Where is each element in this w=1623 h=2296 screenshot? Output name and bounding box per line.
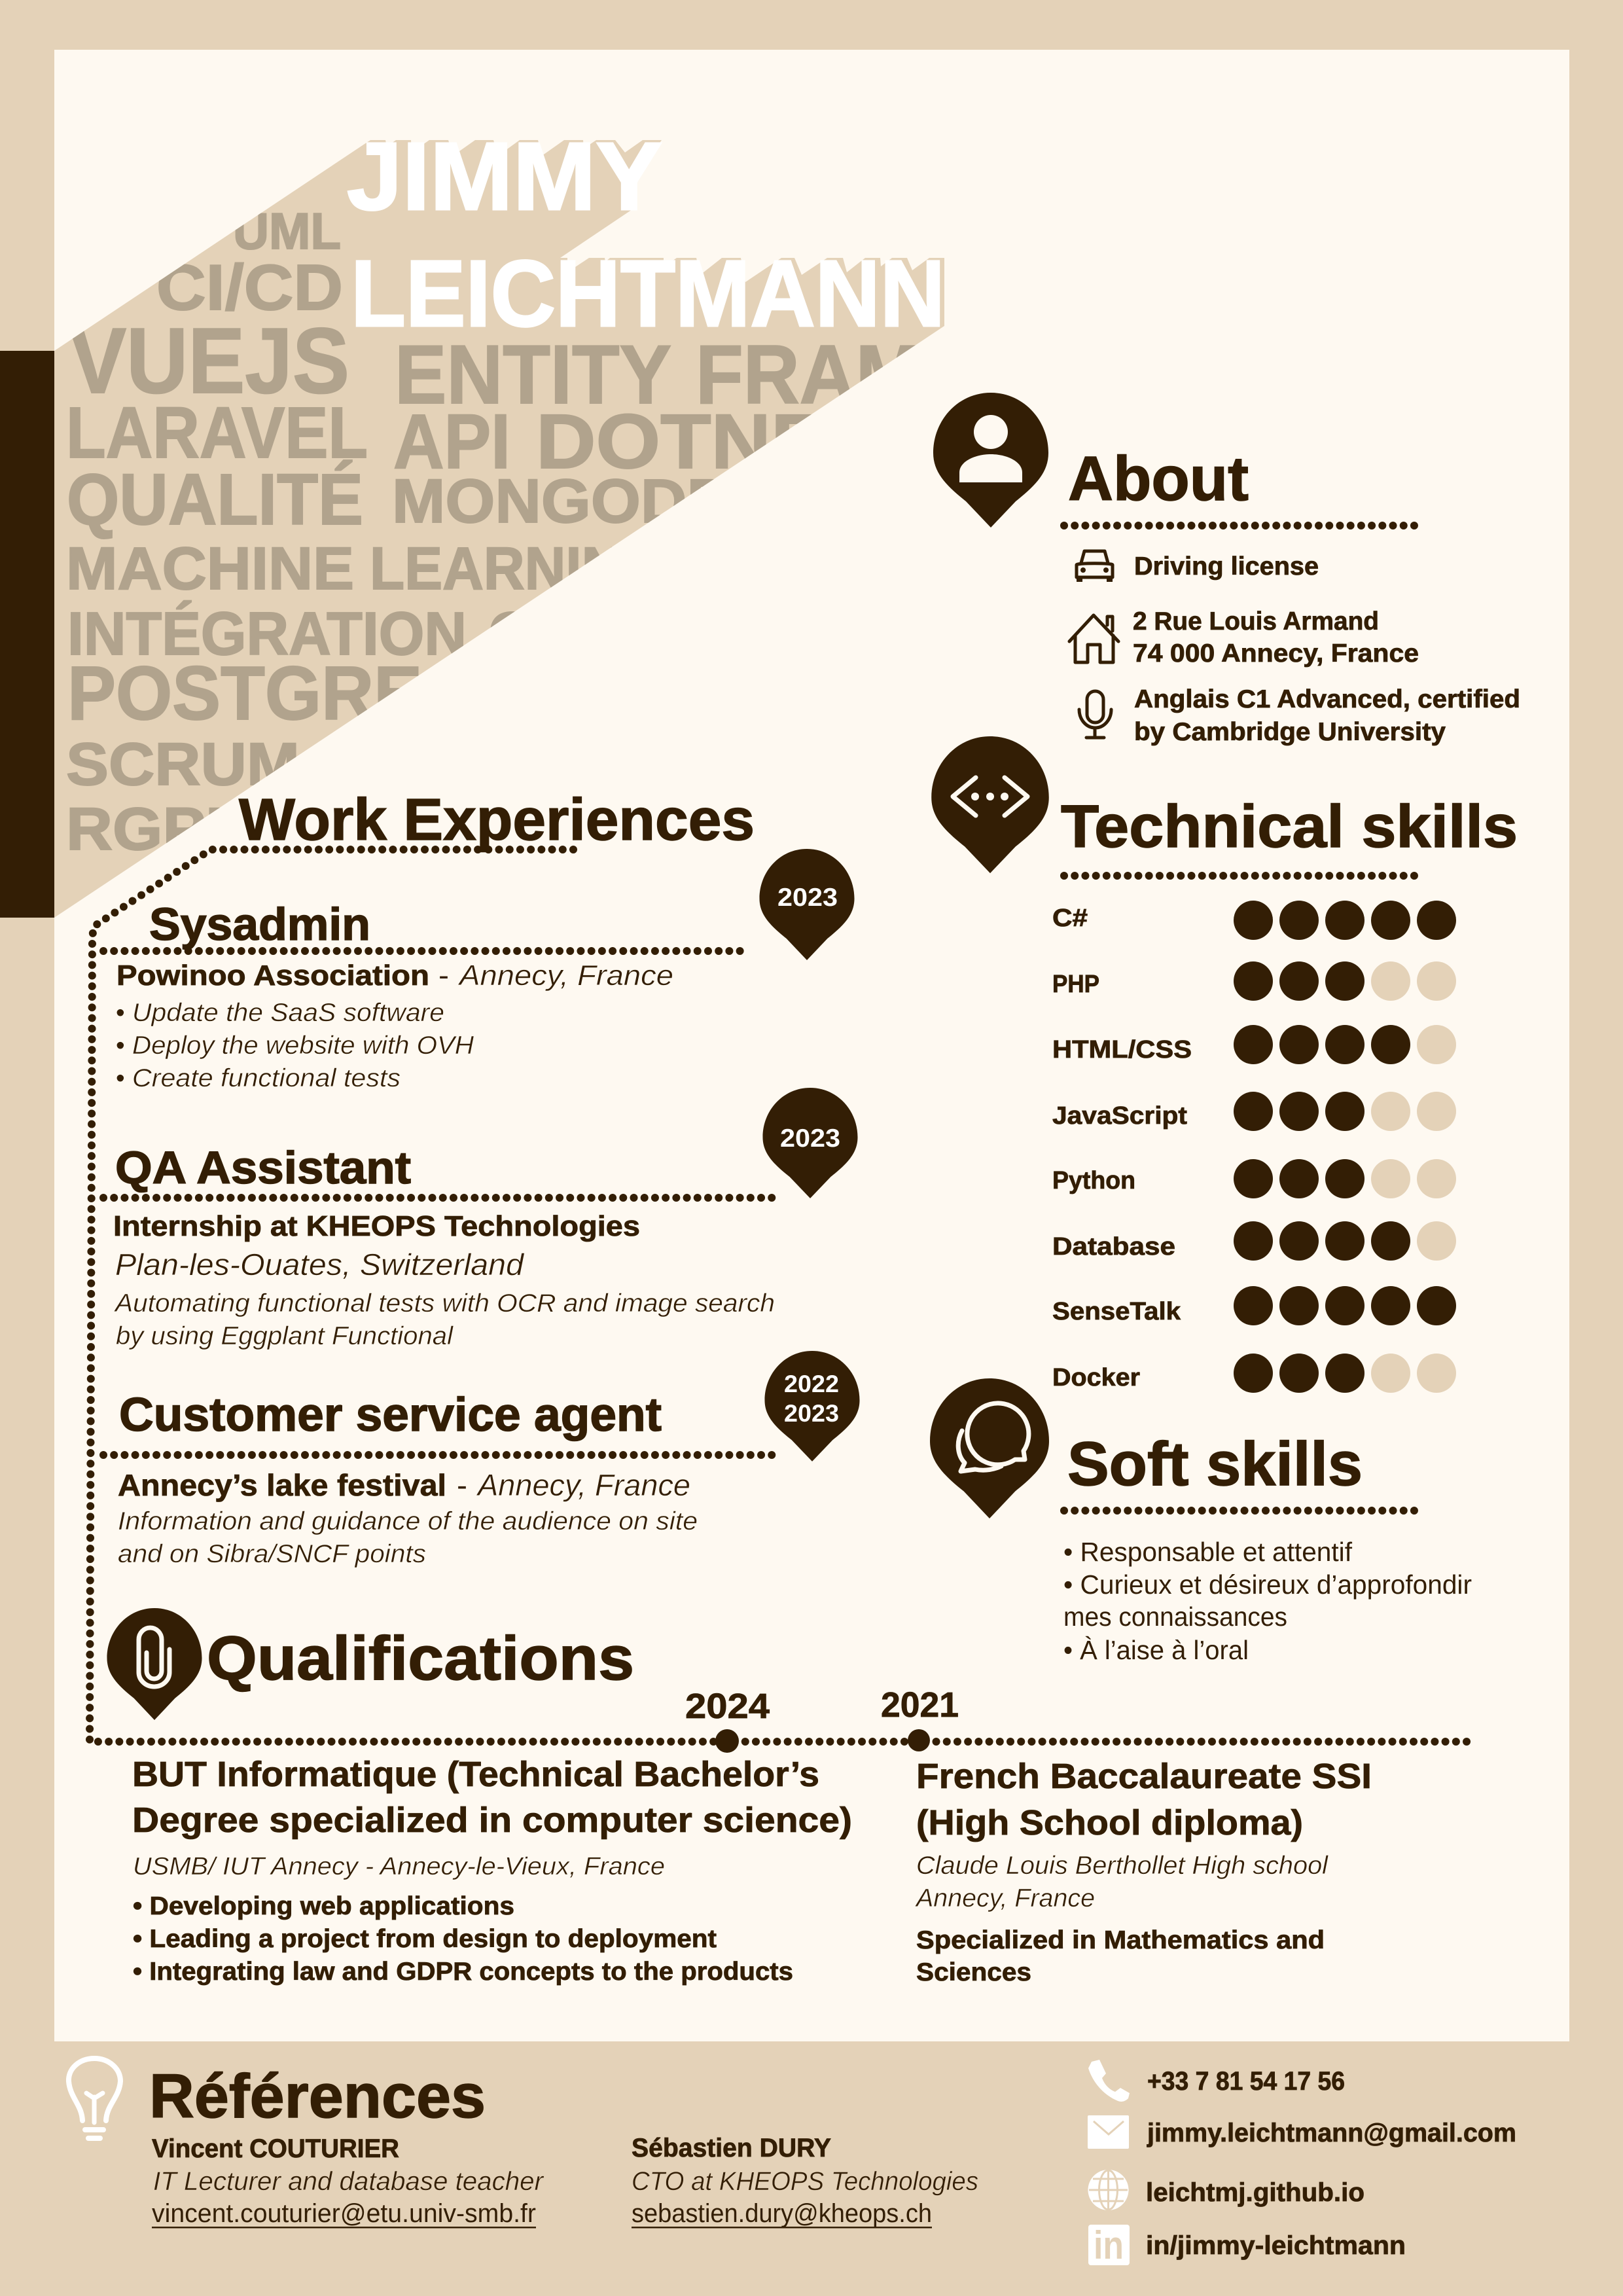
year pin 2023: 2023 — [780, 1124, 840, 1153]
panel: QA Assistant job: by using Eggplant Functional — [116, 1322, 454, 1350]
panel: contact details: +33 7 81 54 17 56 — [1147, 2067, 1345, 2096]
panel: contact details: jimmy.leichtmann@gmail.com — [1147, 2119, 1516, 2147]
timeline dotted path — [90, 850, 1476, 1742]
panel: Qualifications: • Integrating law and GDPR concepts to the products — [133, 1958, 793, 1986]
skill: Docker: Docker — [1052, 1364, 1140, 1391]
title: name — [347, 123, 945, 346]
skill: PHP: PHP — [1052, 971, 1099, 998]
panel: References: CTO at KHEOPS Technologies — [632, 2167, 978, 2196]
skill: HTML/CSS: HTML/CSS — [1052, 1036, 1192, 1064]
panel: contact details: in/jimmy-leichtmann — [1146, 2231, 1406, 2260]
panel: Qualifications: 2024 — [685, 1687, 770, 1726]
year pin 2022-2023: 2023 — [784, 1400, 839, 1427]
panel: Soft skills: • Responsable et attentif — [1063, 1537, 1353, 1567]
panel: Qualifications: USMB/ IUT Annecy - Annecy-le-Vieux, France — [133, 1853, 665, 1880]
panel: QA Assistant job: Plan-les-Ouates, Switzerland — [115, 1247, 524, 1282]
panel: About: 74 000 Annecy, France — [1133, 639, 1419, 668]
icon: globe — [1088, 2170, 1128, 2210]
year pin 2023 — [762, 1088, 858, 1198]
keyword cloud: MACHINE — [66, 535, 354, 602]
icon: house — [1069, 615, 1118, 662]
dark side bar — [0, 351, 54, 918]
panel: Sysadmin job: • — [116, 1064, 125, 1092]
panel: Sysadmin job: Sysadmin — [149, 899, 370, 950]
panel: Sysadmin job: • — [116, 999, 125, 1027]
panel: References: Sébastien DURY — [632, 2134, 831, 2162]
skill: JavaScript — [1052, 1092, 1456, 1131]
keyword cloud: POSTGRESQL — [67, 651, 571, 736]
keyword cloud: UML — [233, 202, 341, 260]
panel: Qualifications: • Leading a project from design to deployment — [133, 1925, 717, 1953]
skill: Database — [1052, 1221, 1456, 1261]
panel: Customer service job: Annecy’s lake festival — [118, 1468, 446, 1502]
panel: About — [933, 393, 1520, 746]
panel: Soft skills: mes connaissances — [1063, 1602, 1287, 1632]
keyword cloud: FRAMEWORK — [696, 328, 1219, 421]
icon: microphone — [1079, 691, 1111, 738]
keyword cloud: API — [393, 399, 510, 485]
keyword cloud: VUEJS — [69, 309, 349, 413]
panel: Qualifications: (High School diploma) — [916, 1803, 1303, 1842]
icon: linkedin: in — [1094, 2223, 1124, 2267]
icon: chat pin — [930, 1378, 1049, 1518]
keyword cloud: RGPD — [66, 796, 252, 863]
keyword cloud: ENTITY — [395, 328, 671, 421]
panel: Soft skills: • À l’aise à l’oral — [1063, 1635, 1249, 1665]
panel: References: IT Lecturer and database teacher — [153, 2167, 544, 2196]
panel: Sysadmin job: Update the SaaS software — [132, 999, 444, 1027]
panel: References — [69, 2058, 978, 2228]
skill: HTML/CSS — [1052, 1025, 1456, 1064]
panel: References: sebastien.dury@kheops.ch — [632, 2199, 932, 2228]
panel: contact details: leichtmj.github.io — [1146, 2178, 1364, 2207]
panel: contact details — [1088, 2060, 1516, 2267]
panel: Qualifications: 2021 — [881, 1685, 959, 1725]
panel: Qualifications: Degree specialized in computer science) — [132, 1801, 852, 1840]
icon: phone — [1088, 2060, 1130, 2102]
skill: C#: C# — [1052, 905, 1088, 932]
icon: envelope — [1088, 2115, 1129, 2149]
keyword cloud: DOTNET — [536, 399, 877, 485]
panel: Qualifications: Annecy, France — [915, 1884, 1095, 1912]
panel: QA Assistant job: Automating functional tests with OCR and image search — [114, 1289, 775, 1318]
panel: References: Vincent COUTURIER — [152, 2134, 399, 2163]
panel: Technical skills: Technical skills — [1061, 793, 1518, 860]
panel: Qualifications: Claude Louis Berthollet High school — [916, 1852, 1329, 1880]
panel: Soft skills: Soft skills — [1067, 1429, 1363, 1499]
panel: QA Assistant job — [103, 1088, 858, 1350]
keyword cloud: CI/CD — [156, 251, 343, 323]
panel: QA Assistant job: Internship at KHEOPS Technologies — [113, 1210, 640, 1242]
keyword cloud: LARAVEL — [66, 393, 368, 473]
year pin 2023: 2023 — [777, 884, 838, 912]
panel: Qualifications: • Developing web applications — [133, 1892, 514, 1920]
panel: Customer service job: and on Sibra/SNCF points — [118, 1540, 426, 1568]
skill: Docker — [1052, 1354, 1456, 1393]
year pin 2023 — [759, 849, 855, 960]
panel: Sysadmin job: Create functional tests — [132, 1064, 401, 1092]
panel: Qualifications: French Baccalaureate SSI — [916, 1757, 1372, 1796]
panel: About: Anglais C1 Advanced, certified — [1134, 685, 1520, 713]
keyword cloud: INTÉGRATION — [67, 600, 467, 668]
skill: JavaScript: JavaScript — [1052, 1102, 1187, 1130]
panel: About: 2 Rue Louis Armand — [1133, 607, 1379, 636]
icon: car — [1077, 551, 1113, 582]
panel: References: Références — [149, 2062, 486, 2131]
icon: code pin — [931, 736, 1049, 873]
panel: Customer service job: Annecy, France — [476, 1468, 690, 1502]
keyword cloud: MONGODB — [392, 467, 733, 536]
title: name: JIMMY — [347, 123, 662, 230]
title: name: LEICHTMANN — [351, 241, 945, 346]
panel: References: vincent.couturier@etu.univ-smb.fr — [152, 2199, 536, 2228]
panel: Sysadmin job: Powinoo Association — [116, 960, 429, 992]
panel: Qualifications: Specialized in Mathematics and — [916, 1926, 1325, 1954]
skill: Python — [1052, 1159, 1456, 1198]
icon: light bulb — [69, 2058, 120, 2141]
panel: Sysadmin job: Annecy, France — [457, 960, 673, 992]
year pin 2022-2023 — [764, 1351, 860, 1462]
panel: QA Assistant job: QA Assistant — [115, 1142, 411, 1193]
icon: paperclip pin — [107, 1608, 202, 1720]
skill: SenseTalk — [1052, 1286, 1456, 1325]
keyword cloud: LEARNING — [370, 535, 667, 602]
panel: Customer service job — [103, 1351, 860, 1568]
panel: Customer service job: Customer service agent — [119, 1389, 662, 1441]
keyword cloud — [67, 213, 916, 851]
panel: Technical skills — [931, 736, 1518, 1393]
panel: Customer service job: Information and guidance of the audience on site — [118, 1507, 698, 1535]
icon: person pin — [933, 393, 1048, 528]
panel: Qualifications — [107, 1608, 1372, 1986]
panel: Qualifications: Qualifications — [207, 1624, 634, 1693]
keyword cloud: QUALITÉ — [67, 459, 363, 540]
panel: Customer service job: - — [457, 1468, 467, 1502]
skill: SenseTalk: SenseTalk — [1052, 1298, 1181, 1325]
skill: Python: Python — [1052, 1167, 1135, 1194]
panel: Sysadmin job: Deploy the website with OVH — [132, 1031, 474, 1060]
panel: About: About — [1068, 444, 1249, 514]
year pin 2022-2023: 2022 — [784, 1371, 839, 1397]
skill: PHP — [1052, 961, 1456, 1001]
keyword cloud: CONTINUE — [488, 600, 815, 668]
keyword cloud: SCRUM — [66, 731, 300, 798]
panel: About: by Cambridge University — [1134, 718, 1446, 746]
panel: Sysadmin job: • — [116, 1031, 125, 1060]
skill: Database: Database — [1052, 1233, 1175, 1261]
panel: Soft skills: • Curieux et désireux d’approfondir — [1063, 1570, 1472, 1600]
panel: Soft skills — [930, 1378, 1472, 1665]
panel: Sysadmin job — [103, 849, 855, 1092]
diagonal tan band behind the name — [54, 140, 944, 918]
panel: Qualifications: BUT Informatique (Technical Bachelor’s — [132, 1755, 819, 1794]
panel: Qualifications: Sciences — [916, 1958, 1031, 1986]
heading: Work Experiences: Work Experiences — [239, 787, 755, 853]
skill: C# — [1052, 901, 1456, 940]
panel: Sysadmin job: - — [438, 960, 449, 992]
panel: About: Driving license — [1134, 552, 1319, 581]
